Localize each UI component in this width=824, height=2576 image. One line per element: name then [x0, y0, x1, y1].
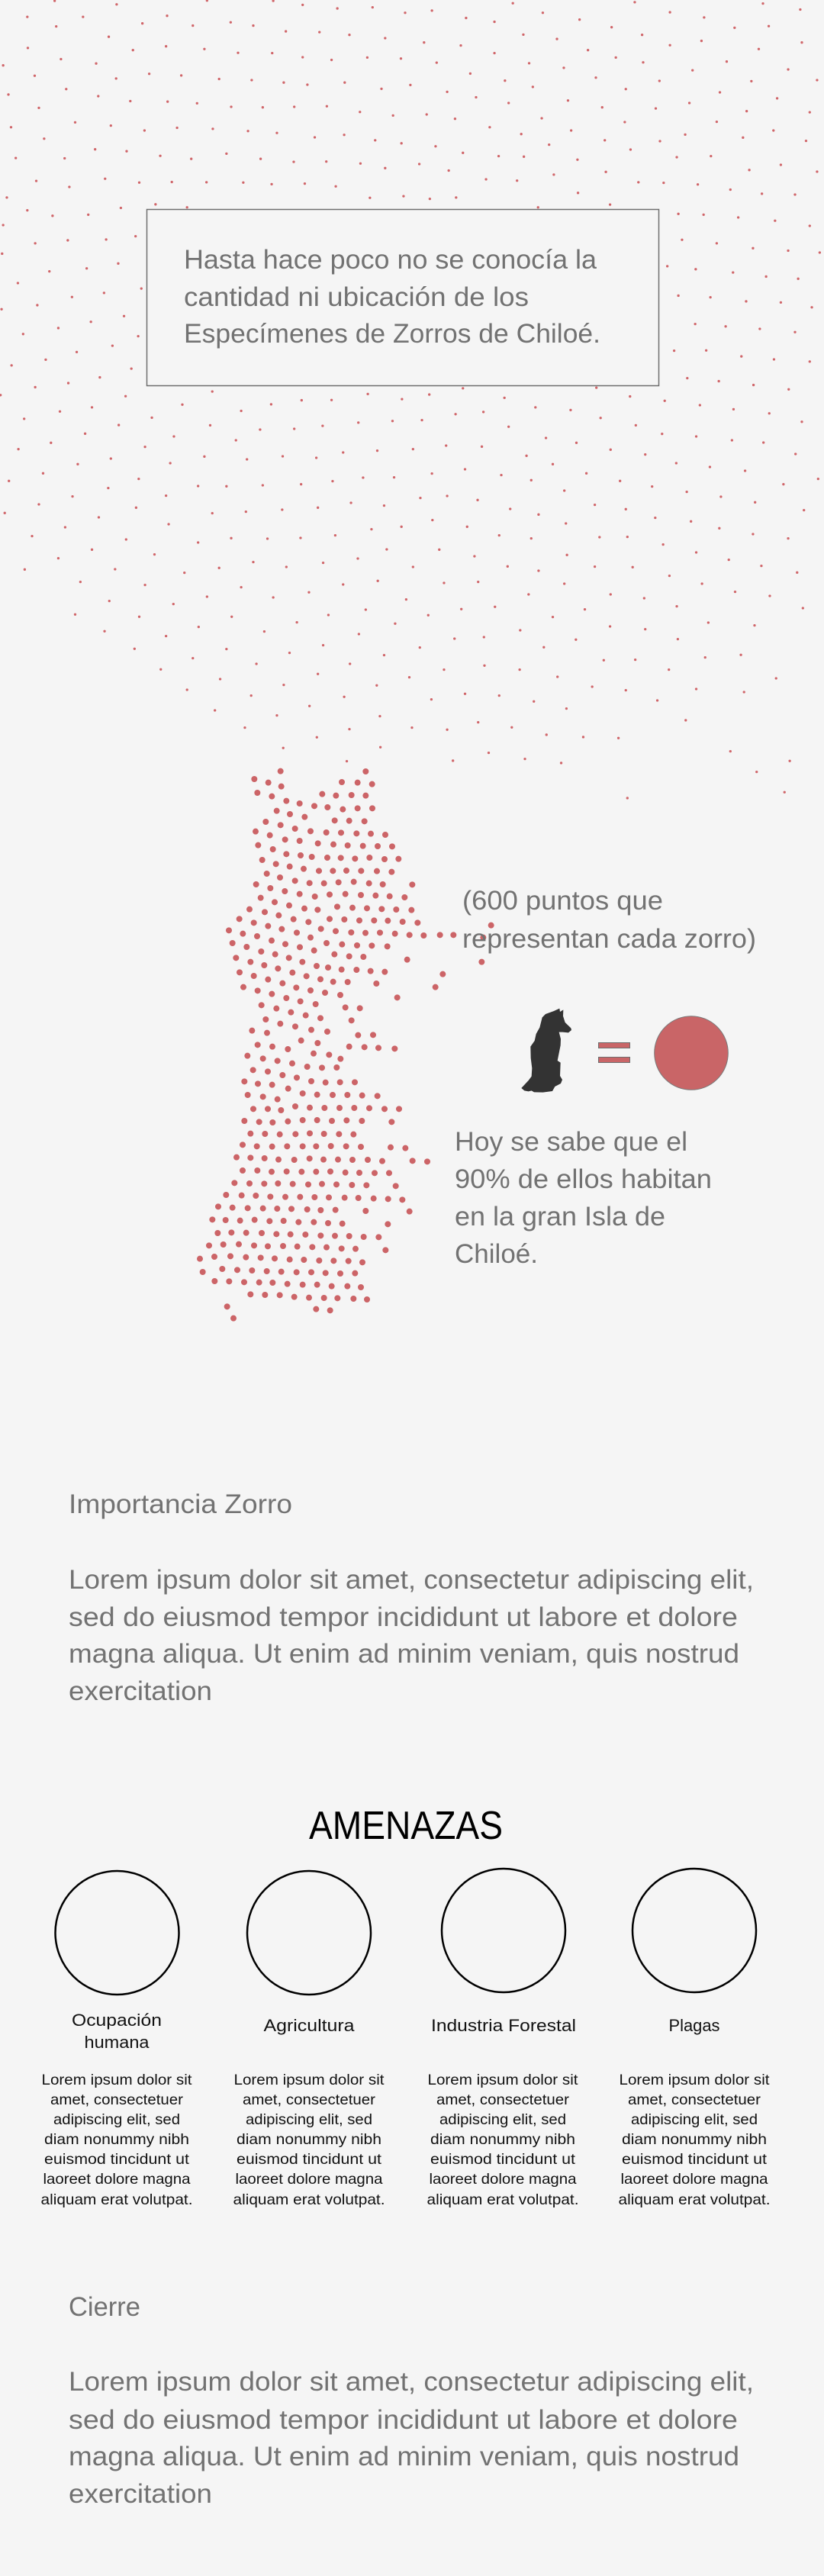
threat description: aliquam erat volutpat.: [233, 2191, 385, 2208]
paragraph: Lorem ipsum dolor sit amet, consectetur adipiscing elit,: [69, 2367, 754, 2397]
threat description: euismod tincidunt ut: [44, 2151, 190, 2168]
threat description: Lorem ipsum dolor sit: [233, 2072, 385, 2088]
threat description: diam nonummy nibh: [622, 2131, 767, 2148]
threat description: euismod tincidunt ut: [430, 2151, 576, 2168]
icon placeholder circle: [55, 1871, 179, 1995]
threat description: [618, 2072, 771, 2208]
threat description: [41, 2072, 192, 2208]
threat description: laoreet dolore magna: [235, 2171, 383, 2188]
intro text box: Especímenes de Zorros de Chiloé.: [184, 319, 600, 349]
threat description: Lorem ipsum dolor sit: [427, 2072, 578, 2088]
threat column: Agricultura: [233, 1871, 385, 2208]
paragraph: magna aliqua. Ut enim ad minim veniam, quis nostrud: [69, 2442, 739, 2471]
icon: red dot legend: [655, 1016, 728, 1090]
icon placeholder circle: [442, 1869, 565, 1992]
threat description: laoreet dolore magna: [429, 2171, 577, 2188]
icon: sitting fox silhouette: [521, 1009, 571, 1093]
threat description: laoreet dolore magna: [621, 2171, 768, 2188]
threat description: adipiscing elit, sed: [246, 2111, 372, 2128]
heading: AMENAZAS: AMENAZAS: [309, 1804, 503, 1848]
section: Cierre: [69, 2292, 754, 2509]
heading: Importancia Zorro: Importancia Zorro: [69, 1489, 292, 1519]
text: 90 percent on the island: Chiloé.: [455, 1239, 538, 1269]
paragraph: Lorem ipsum dolor sit amet, consectetur adipiscing elit,: [69, 1565, 754, 1595]
paragraph: magna aliqua. Ut enim ad minim veniam, quis nostrud: [69, 1639, 739, 1669]
threat column: Industria Forestal: [427, 1869, 578, 2208]
threat description: [427, 2072, 578, 2208]
threat title: Industria Forestal: [431, 2016, 576, 2035]
heading: Cierre: Cierre: [69, 2292, 140, 2322]
paragraph: sed do eiusmod tempor incididunt ut labore et dolore: [69, 2405, 738, 2435]
threat description: diam nonummy nibh: [237, 2131, 381, 2148]
threat description: aliquam erat volutpat.: [427, 2191, 578, 2208]
threat description: amet, consectetuer: [243, 2091, 376, 2108]
threat description: [233, 2072, 385, 2208]
intro text box: cantidad ni ubicación de los: [184, 282, 529, 312]
threat description: euismod tincidunt ut: [237, 2151, 382, 2168]
threat description: diam nonummy nibh: [430, 2131, 575, 2148]
intro text box: [146, 209, 659, 386]
threat description: Lorem ipsum dolor sit: [41, 2072, 192, 2088]
text: 90 percent on the island: en la gran Isla de: [455, 1202, 665, 1232]
threat description: aliquam erat volutpat.: [41, 2191, 192, 2208]
threat description: amet, consectetuer: [628, 2091, 761, 2108]
threat description: diam nonummy nibh: [44, 2131, 189, 2148]
dot field: scattered foxes falling toward the island: [1, 1, 819, 798]
threat description: adipiscing elit, sed: [439, 2111, 566, 2128]
threat description: laoreet dolore magna: [43, 2171, 191, 2188]
threat title: humana: [84, 2033, 150, 2052]
paragraph: [69, 1565, 754, 1706]
paragraph: sed do eiusmod tempor incididunt ut labore et dolore: [69, 1602, 738, 1632]
text: 90 percent on the island: Hoy se sabe que el: [455, 1127, 687, 1157]
threat title: [72, 2011, 162, 2052]
dot map: Isla de Chiloé: [200, 771, 491, 1319]
text: 90 percent on the island: 90% de ellos habitan: [455, 1164, 712, 1194]
paragraph: exercitation: [69, 1676, 212, 1706]
threat column: Plagas: [618, 1869, 771, 2208]
note: 600 dots: representan cada zorro): [462, 924, 756, 954]
threat description: Lorem ipsum dolor sit: [620, 2072, 770, 2088]
text: 90 percent on the island: [455, 1127, 712, 1269]
note: 600 dots: (600 puntos que: [462, 886, 663, 916]
threat title: Plagas: [668, 2016, 720, 2035]
threat description: adipiscing elit, sed: [631, 2111, 758, 2128]
icon: equals sign: [598, 1042, 630, 1062]
note: 600 dots: [462, 886, 756, 954]
threat description: amet, consectetuer: [50, 2091, 184, 2108]
threat description: euismod tincidunt ut: [622, 2151, 768, 2168]
threat title: Ocupación: [72, 2011, 162, 2030]
threat description: aliquam erat volutpat.: [618, 2191, 771, 2208]
threat column: Ocupación humana: [41, 1871, 192, 2208]
section: Importancia Zorro: [69, 1489, 754, 1706]
threat description: amet, consectetuer: [436, 2091, 570, 2108]
paragraph: exercitation: [69, 2479, 212, 2509]
icon placeholder circle: [632, 1869, 756, 1992]
intro text box: Hasta hace poco no se conocía la: [184, 245, 597, 275]
threat description: adipiscing elit, sed: [53, 2111, 180, 2128]
threat title: Agricultura: [264, 2016, 355, 2035]
paragraph: [69, 2367, 754, 2509]
icon placeholder circle: [247, 1871, 371, 1995]
